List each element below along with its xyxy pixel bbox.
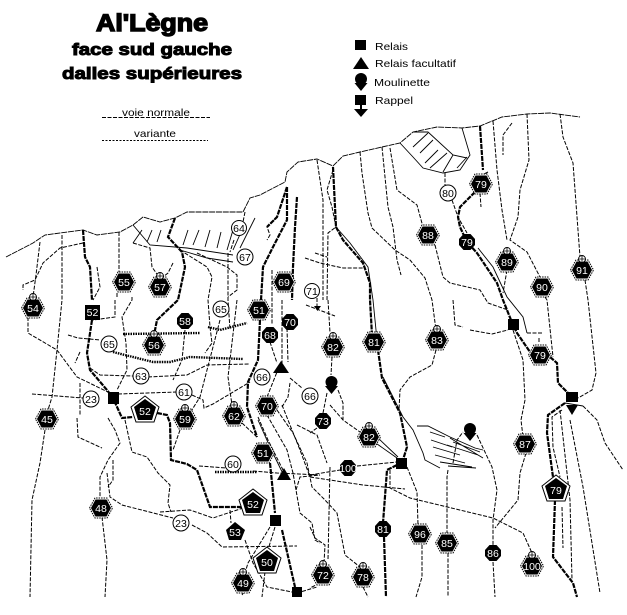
route badges: double hexagons: 79 [534, 350, 546, 362]
route badges: solid hexagons: 86 [487, 548, 499, 560]
route badges: double hexagons: 88 [422, 230, 434, 242]
circle numbers: 64 [233, 223, 245, 235]
route badges: double hexagons: 49 [237, 578, 249, 590]
circle numbers: 71 [306, 286, 318, 298]
route badges: double hexagons: 69 [278, 277, 290, 289]
line key: voie normale [122, 107, 190, 119]
normal route lines [23, 114, 623, 597]
top-rope markers [30, 248, 586, 576]
circle numbers: 80 [442, 188, 454, 200]
route badges: double hexagons: 51 [253, 305, 265, 317]
title: face sud gauche [72, 40, 232, 59]
route badges: solid hexagons: 73 [317, 416, 329, 428]
line key: variante [134, 128, 176, 140]
symbol legend: Relais facultatif [375, 58, 456, 70]
route badges: double hexagons: 83 [431, 335, 443, 347]
line key [102, 107, 210, 140]
route badges: double hexagons: 87 [519, 439, 531, 451]
circle numbers: 65 [103, 339, 115, 351]
route badges: solid hexagons: 100 [339, 463, 357, 475]
route badges: solid hexagons [177, 234, 501, 561]
circle numbers: 63 [135, 371, 147, 383]
route badges: white circles [83, 185, 456, 531]
circle numbers: 67 [239, 252, 251, 264]
route badges: pentagons: 52 [247, 499, 259, 511]
route badges: double hexagons: 62 [228, 411, 240, 423]
route badges: double hexagons: 55 [118, 277, 130, 289]
title [62, 10, 242, 83]
route badges: pentagons: 79 [550, 485, 562, 497]
route badges: double hexagons: 85 [441, 538, 453, 550]
relay 52 [85, 305, 100, 320]
route badges: double hexagons: 56 [148, 340, 160, 352]
route badges: double hexagons: 82 [327, 342, 339, 354]
route badges: solid hexagons: 79 [461, 237, 473, 249]
circle numbers: 66 [304, 391, 316, 403]
route badges: solid hexagons: 68 [264, 330, 276, 342]
route badges: double hexagons: 72 [317, 570, 329, 582]
circle numbers: 65 [215, 304, 227, 316]
symbol legend [353, 40, 456, 117]
route badges: double hexagons: 82 [363, 432, 375, 444]
title: dalles supérieures [62, 64, 242, 83]
route badges: double hexagons: 91 [576, 265, 588, 277]
route badges: solid hexagons: 81 [377, 524, 389, 536]
relay 52: 52 [87, 307, 98, 319]
symbol legend: Relais [375, 41, 408, 53]
ridge line [6, 113, 580, 257]
rough ledges [113, 323, 257, 472]
route badges: pentagons [131, 396, 570, 573]
route badges: double hexagons: 79 [475, 179, 487, 191]
route badges: double hexagons: 81 [368, 337, 380, 349]
circle numbers: 23 [85, 394, 97, 406]
route badges: pentagons: 52 [139, 406, 151, 418]
circle numbers [85, 188, 454, 530]
route badges: pentagons: 53 [229, 527, 241, 539]
route badges: double hexagons: 51 [257, 448, 269, 460]
route badges: solid hexagons: 70 [284, 317, 296, 329]
route badges: double hexagons: 54 [27, 303, 39, 315]
route badges: double hexagons: 45 [41, 414, 53, 426]
relay squares [108, 319, 578, 597]
circle numbers: 66 [256, 372, 268, 384]
thin parallel lines [133, 128, 583, 478]
route badges: double hexagons: 89 [501, 257, 513, 269]
route badges: double hexagons: 78 [357, 572, 369, 584]
symbol legend: Rappel [375, 95, 413, 107]
route badges: solid hexagons: 58 [179, 316, 191, 328]
route badges: double hexagons: 59 [179, 414, 191, 426]
symbol legend: Moulinette [374, 77, 430, 89]
circle numbers: 60 [227, 459, 239, 471]
circle numbers: 23 [175, 518, 187, 530]
route badges: double hexagons: 70 [261, 401, 273, 413]
route badges: double hexagons [22, 174, 594, 593]
thick main routes [83, 126, 577, 597]
title: Al'Lègne [96, 10, 208, 37]
small arrow [314, 306, 321, 311]
optional relays [273, 361, 291, 480]
route badges: pentagons: 50 [261, 557, 273, 569]
circle numbers: 61 [178, 387, 190, 399]
route badges: double hexagons: 96 [414, 529, 426, 541]
route badges: double hexagons: 57 [154, 282, 166, 294]
route badges: double hexagons: 90 [536, 282, 548, 294]
moulinettes [325, 376, 476, 441]
route badges: double hexagons: 48 [95, 503, 107, 515]
route badges: double hexagons: 100 [523, 561, 541, 573]
